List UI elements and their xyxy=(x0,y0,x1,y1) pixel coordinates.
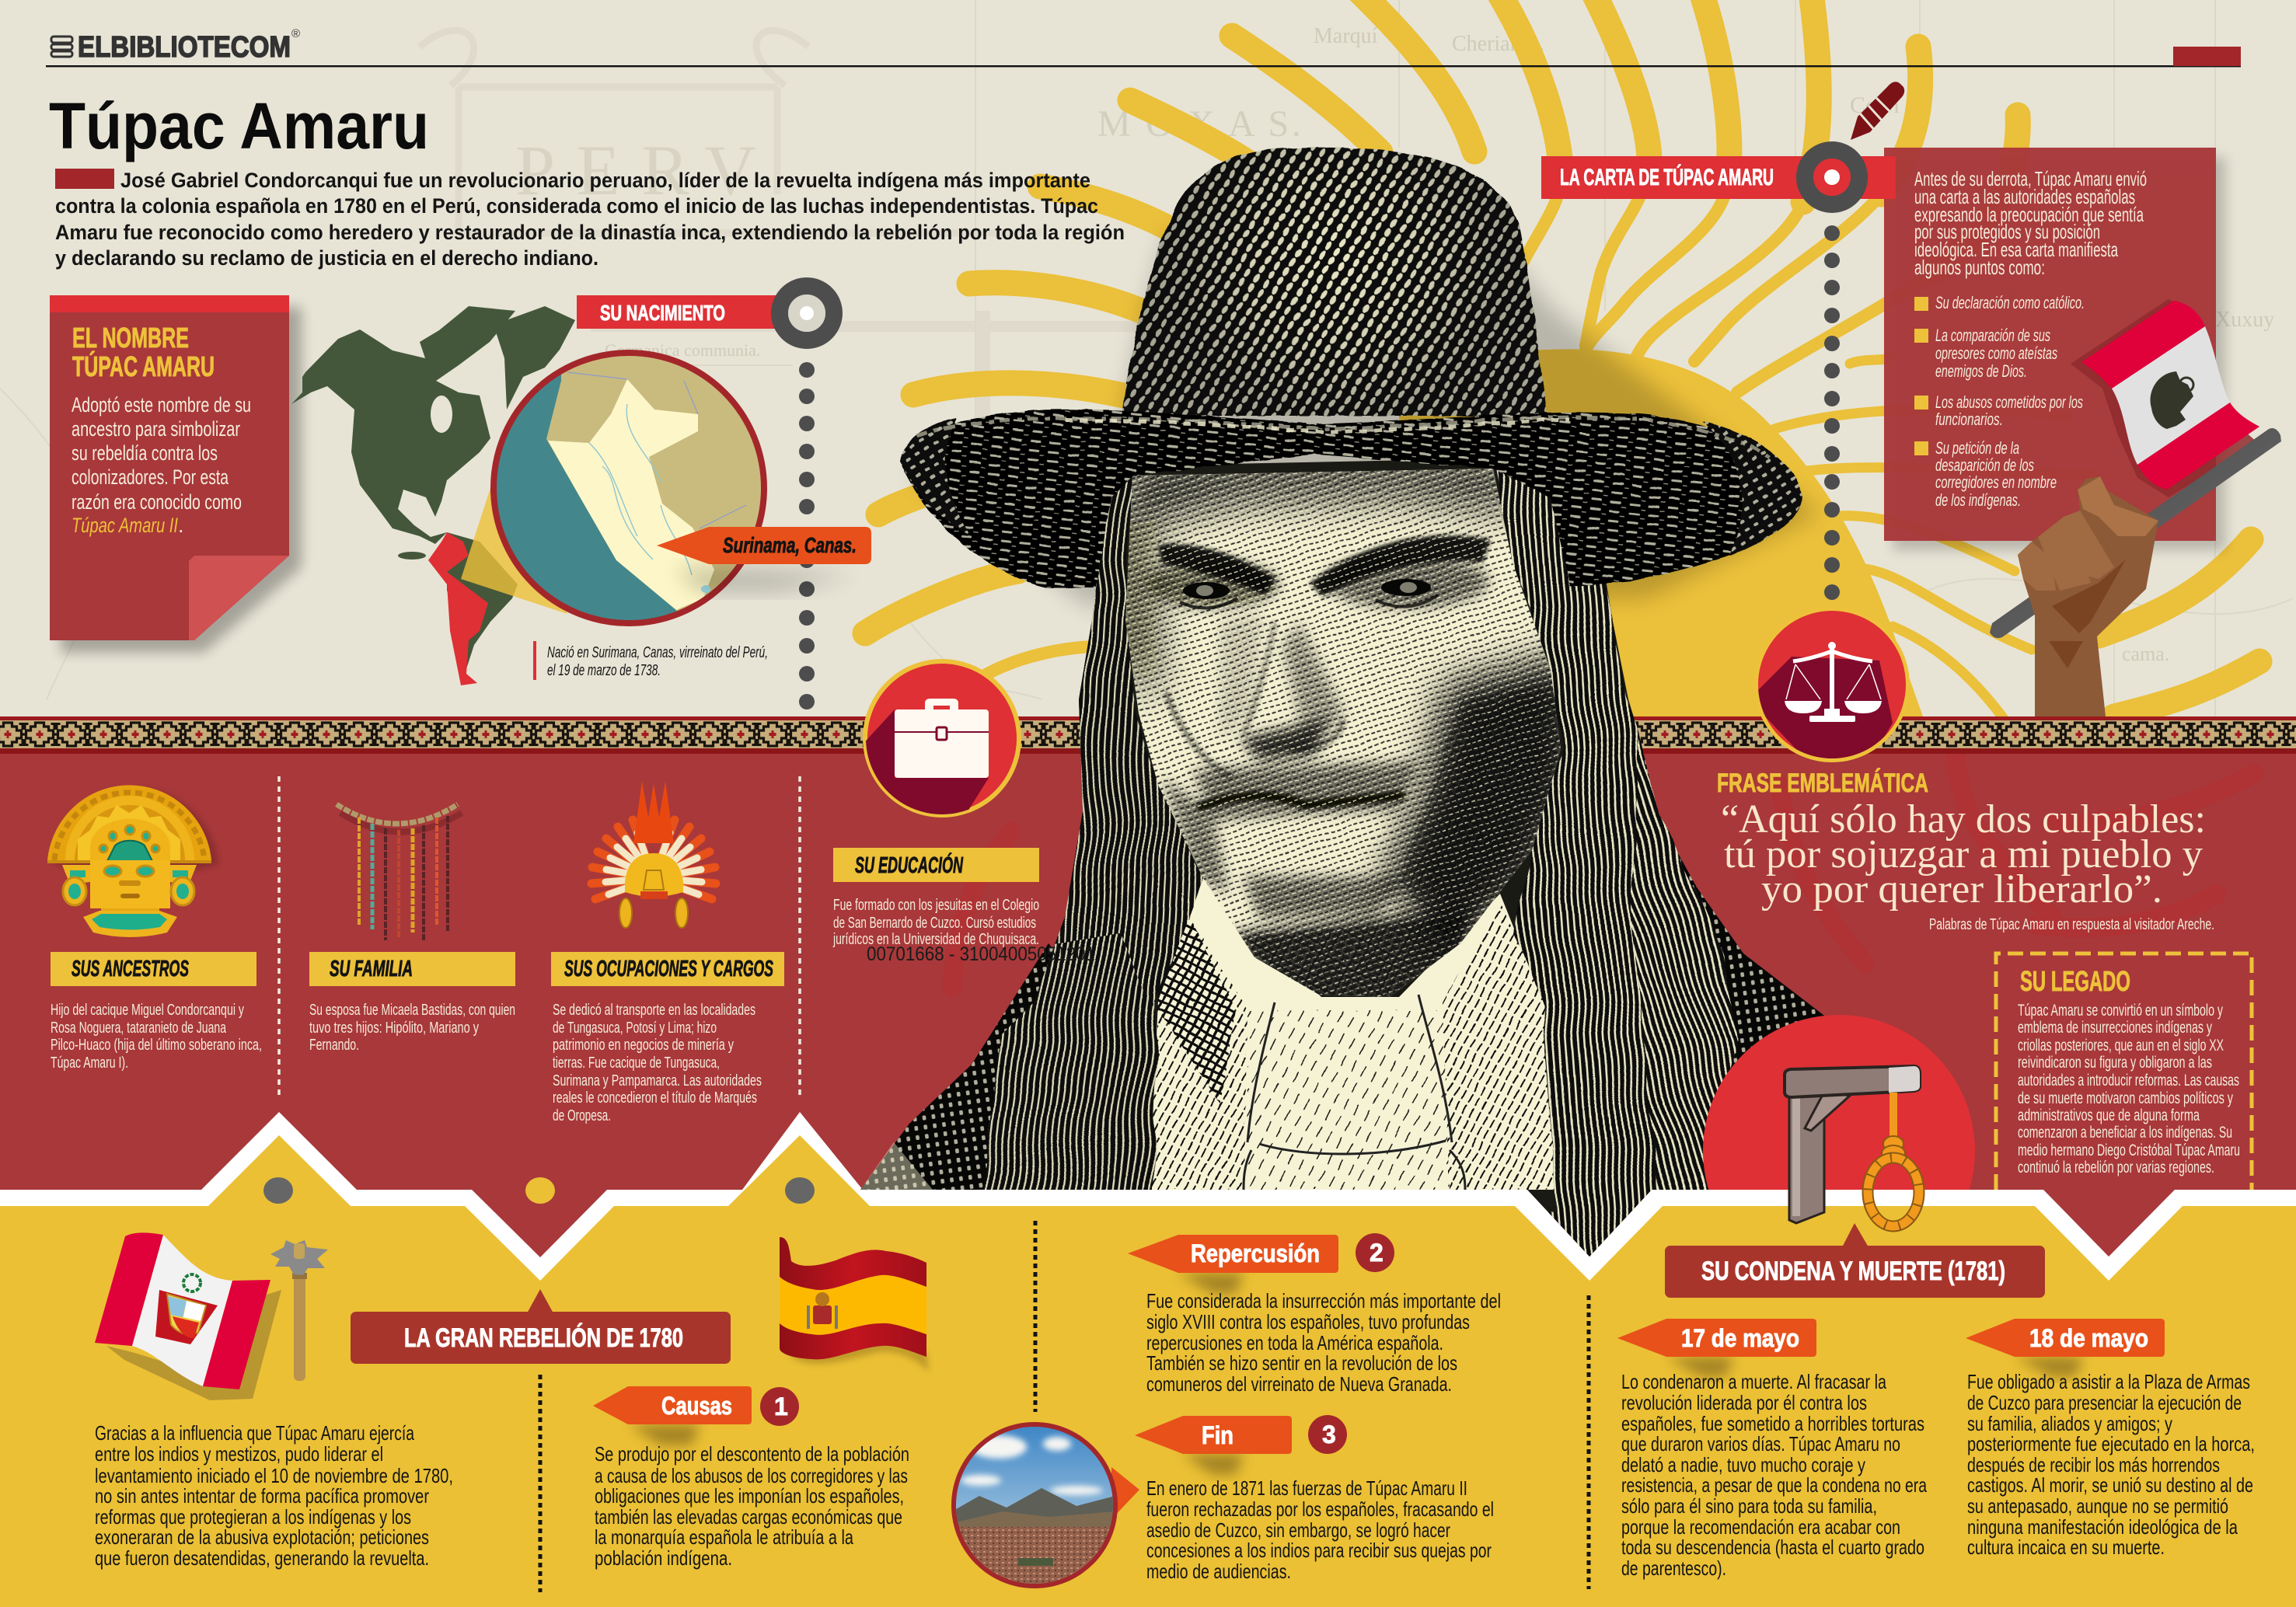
text: ancestros: Pilco-Huaco (hija del último soberano inca, xyxy=(51,1037,262,1054)
text: causas: la monarquía española le atribuía a la xyxy=(595,1525,853,1549)
icon: pencil xyxy=(1851,82,1904,140)
eyes xyxy=(1183,582,1230,599)
text: repercusion: comuneros del virreinato de Nueva Granada. xyxy=(1146,1372,1452,1396)
panel: el nombre xyxy=(50,295,302,653)
body silhouette and coat xyxy=(860,943,1053,1190)
body: reivindicaron su figura y obligaron a las xyxy=(2018,1054,2212,1072)
silhouette base xyxy=(860,458,1824,1257)
text: la gran rebelion intro: que fueron desatendidas, generando la revuelta. xyxy=(95,1546,429,1570)
text: la gran rebelion intro: Gracias a la influencia que Túpac Amaru ejercía xyxy=(95,1421,414,1445)
icon: scales circle xyxy=(1749,607,1910,777)
body: Adoptó este nombre de su xyxy=(72,393,251,417)
intro paragraph: José Gabriel Condorcanqui fue un revolucionario peruano, líder de la revuelta indígena más importante xyxy=(120,169,1090,192)
text: 17 de mayo: resistencia, a pesar de que la condena no era xyxy=(1621,1473,1927,1497)
body: una carta a las autoridades españolas xyxy=(1914,185,2135,208)
map background: Coch xyxy=(1850,92,1899,118)
header logo: ELBIBLIOTECOM xyxy=(78,31,291,64)
map background: cama. xyxy=(2122,643,2169,665)
label: su educacion: SU EDUCACIÓN xyxy=(855,852,964,878)
heading: TÚPAC AMARU xyxy=(72,350,215,382)
text: fin: En enero de 1871 las fuerzas de Túpac Amaru II xyxy=(1146,1476,1467,1500)
sun and rays xyxy=(865,0,2259,719)
text: ocupaciones: reales le concedieron el título de Marqués xyxy=(553,1089,757,1107)
bullets: La comparación de sus xyxy=(1935,326,2050,345)
text: causas: obligaciones que les imponían los españoles, xyxy=(595,1484,904,1508)
body xyxy=(1914,167,2147,279)
icon: quipu necklace xyxy=(337,804,462,942)
body xyxy=(72,393,251,537)
text: 17 de mayo: de parentesco). xyxy=(1621,1556,1726,1580)
text: ocupaciones: Surimana y Pampamarca. Las autoridades xyxy=(553,1072,762,1089)
icon: peru flag xyxy=(95,1232,281,1400)
text: la gran rebelion intro: reformas que protegieran a los indígenas y los xyxy=(95,1505,411,1529)
body: razón era conocido como xyxy=(72,490,242,514)
pole xyxy=(1990,428,2281,638)
text: ancestros: Túpac Amaru I). xyxy=(51,1054,128,1072)
woven pattern band xyxy=(0,716,2296,754)
map background: Germanica communia. xyxy=(605,340,760,360)
text: 17 de mayo xyxy=(1621,1370,1927,1580)
text: fin: asedio de Cuzco, sin embargo, se logró hacer xyxy=(1146,1518,1450,1542)
icon: gallows and noose xyxy=(1785,1066,1920,1226)
body: administrativos que de alguna forma xyxy=(2018,1107,2200,1124)
text: ocupaciones xyxy=(553,1002,762,1124)
map background: M O X A S. xyxy=(1097,103,1301,145)
body: Antes de su derrota, Túpac Amaru envió xyxy=(1914,167,2147,190)
text: 18 de mayo: su familia, aliados y amigos; y xyxy=(1967,1412,2172,1435)
face local shading xyxy=(1146,555,1488,1006)
text: educacion xyxy=(832,897,1039,948)
bullets: Su petición de la xyxy=(1935,438,2019,458)
tag: fin: Fin xyxy=(1202,1421,1233,1449)
map: americas xyxy=(291,306,575,685)
black dashed dividers xyxy=(540,1221,1589,1592)
hair right xyxy=(1493,469,1737,1267)
hand xyxy=(2018,476,2158,716)
panel: la carta xyxy=(1884,148,2225,550)
text: la gran rebelion intro: entre los indios y mestizos, pudo liderar el xyxy=(95,1442,383,1466)
title: su condena y muerte: SU CONDENA Y MUERTE (1781) xyxy=(1701,1257,2005,1286)
text: educacion: jurídicos en la Universidad de Chuquisaca. xyxy=(832,931,1039,948)
body: su rebeldía contra los xyxy=(72,441,218,465)
face broad shading xyxy=(1111,458,1578,964)
text: la gran rebelion intro xyxy=(95,1421,453,1570)
brows, eye sockets and mouth xyxy=(1158,535,1491,807)
frase emblematica heading: FRASE EMBLEMÁTICA xyxy=(1717,769,1928,798)
text: fin xyxy=(1146,1476,1494,1583)
icon: mace xyxy=(270,1240,328,1381)
intro paragraph xyxy=(55,169,1125,270)
map background: PERV xyxy=(515,131,756,210)
column dividers xyxy=(279,776,800,1096)
text: causas: población indígena. xyxy=(595,1546,732,1570)
text: 17 de mayo: delató a nadie, tuvo mucho coraje y xyxy=(1621,1453,1865,1476)
text: fin: fueron rechazadas por los españoles, fracasando el xyxy=(1146,1497,1494,1521)
callout: surinama: Surinama, Canas. xyxy=(723,533,857,557)
text: ocupaciones: Se dedicó al transporte en las localidades xyxy=(553,1002,755,1019)
body: expresando la preocupación que sentía xyxy=(1914,203,2144,226)
intro paragraph: contra la colonia española en 1780 en el Perú, considerada como el inicio de las luchas independentistas. Túpac xyxy=(55,194,1098,218)
body: ideológica. En esa carta manifiesta xyxy=(1914,238,2118,261)
tag: 17 de mayo xyxy=(1617,1319,1816,1377)
body: colonizadores. Por esta xyxy=(72,465,229,489)
panel: su legado xyxy=(1996,953,2252,1190)
text: familia: Fernando. xyxy=(309,1037,359,1054)
south america green xyxy=(447,532,518,678)
icon: inca gold mask xyxy=(47,785,218,937)
tag: repercusion: Repercusión xyxy=(1191,1239,1320,1267)
text: 18 de mayo xyxy=(1967,1370,2255,1559)
text: ocupaciones: patrimonio en negocios de minería y xyxy=(553,1037,734,1054)
label: sus ancestros xyxy=(51,952,256,986)
label: sus ancestros: SUS ANCESTROS xyxy=(72,957,189,981)
tag: causas xyxy=(593,1386,799,1445)
su nacimiento label xyxy=(577,295,777,329)
dotted timeline: carta xyxy=(1805,150,1859,600)
label: sus ocupaciones y cargos xyxy=(551,952,784,986)
flag xyxy=(2071,299,2258,497)
text: causas: a causa de los abusos de los corregidores y las xyxy=(595,1464,908,1487)
quote: yo por querer liberarlo”. xyxy=(1761,867,2162,912)
text: 17 de mayo: revolución liderada por él contra los xyxy=(1621,1391,1867,1414)
la carta label bar: LA CARTA DE TÚPAC AMARU xyxy=(1560,164,1774,190)
text: educacion: de San Bernardo de Cuzco. Cursó estudios xyxy=(833,915,1036,932)
text: ancestros xyxy=(51,1002,262,1072)
chest xyxy=(1150,878,1562,1190)
stray code text: 00701668 - 31004005051201 xyxy=(867,943,1095,965)
caption: birth xyxy=(533,641,768,680)
label: sus ocupaciones y cargos: SUS OCUPACIONES Y CARGOS xyxy=(564,957,773,981)
heading xyxy=(72,322,215,382)
body: Túpac Amaru II xyxy=(72,514,178,537)
title: su condena y muerte xyxy=(1665,1223,2045,1298)
tag: 18 de mayo: 18 de mayo xyxy=(2029,1324,2148,1352)
portrait of Túpac Amaru xyxy=(860,148,1824,1267)
quote: tú por sojuzgar a mi pueblo y xyxy=(1724,832,2203,877)
label: su educacion xyxy=(833,848,1039,882)
text: ocupaciones: de Oropesa. xyxy=(553,1107,611,1124)
icon: hand holding flag xyxy=(1990,299,2281,716)
flag emblem xyxy=(2151,371,2193,429)
text: ocupaciones: de Tungasuca, Potosí y Lima; hizo xyxy=(553,1020,717,1037)
icon: feather headdress xyxy=(591,781,716,928)
hair left xyxy=(978,466,1203,1212)
text: repercusion: repercusiones en toda la América española. xyxy=(1146,1331,1443,1354)
text: fin: medio de audiencias. xyxy=(1146,1560,1291,1583)
text: ancestros: Hijo del cacique Miguel Condorcanqui y xyxy=(51,1002,244,1019)
tag: repercusion xyxy=(1128,1233,1394,1294)
text: 17 de mayo: Lo condenaron a muerte. Al fracasar la xyxy=(1621,1370,1886,1393)
label: su familia xyxy=(309,952,515,986)
header rule xyxy=(46,47,2241,67)
body: algunos puntos como: xyxy=(1914,256,2045,279)
title: la gran rebelion: LA GRAN REBELIÓN DE 1780 xyxy=(404,1323,683,1353)
heading: SU LEGADO xyxy=(2020,965,2130,997)
body: ancestro para simbolizar xyxy=(72,417,240,441)
text: familia: tuvo tres hijos: Hipólito, Mariano y xyxy=(309,1020,479,1037)
tag: causas: 1 xyxy=(774,1393,788,1421)
map background: Xuxuy xyxy=(2215,308,2274,332)
tag: causas: Causas xyxy=(661,1392,732,1420)
peru map circle xyxy=(482,342,769,633)
tag: 17 de mayo: 17 de mayo xyxy=(1681,1324,1799,1352)
text: causas xyxy=(595,1442,909,1570)
icon: briefcase circle xyxy=(843,659,1021,824)
text: causas: también las elevadas cargas económicas que xyxy=(595,1505,902,1529)
label: su familia: SU FAMILIA xyxy=(330,957,413,981)
text: 18 de mayo: cultura incaica en su muerte. xyxy=(1967,1536,2165,1559)
text: la gran rebelion intro: no sin antes intentar de forma pacífica promover xyxy=(95,1484,429,1508)
caption: birth: Nació en Surimana, Canas, virreinato del Perú, xyxy=(547,644,768,661)
hat crown xyxy=(899,148,1802,588)
text: causas: Se produjo por el descontento de la población xyxy=(595,1442,909,1466)
body: . xyxy=(178,514,184,537)
bullets: opresores como ateístas xyxy=(1935,343,2057,363)
text: 17 de mayo: sólo para él sino para toda su familia, xyxy=(1621,1494,1877,1518)
intro paragraph: y declarando su reclamo de justicia en el derecho indiano. xyxy=(55,246,598,270)
tag: fin: 3 xyxy=(1322,1421,1336,1448)
bullets xyxy=(1914,293,2085,510)
text: repercusion: También se hizo sentir en la revolución de los xyxy=(1146,1351,1457,1375)
north america xyxy=(291,306,515,544)
caption: birth: el 19 de marzo de 1738. xyxy=(547,662,661,679)
bullets: desaparición de los xyxy=(1935,455,2034,475)
bullets: de los indígenas. xyxy=(1935,490,2021,510)
tag: repercusion: 2 xyxy=(1370,1239,1384,1267)
su nacimiento label: SU NACIMIENTO xyxy=(600,301,725,325)
title: Túpac Amaru xyxy=(49,89,429,162)
text: repercusion: siglo XVIII contra los españoles, tuvo profundas xyxy=(1146,1310,1470,1333)
text: ocupaciones: tierras. Fue cacique de Tungasuca, xyxy=(553,1054,720,1072)
text: repercusion: Fue considerada la insurrección más importante del xyxy=(1146,1289,1501,1312)
face xyxy=(1111,458,1578,1006)
quote xyxy=(1721,797,2214,933)
text: 17 de mayo: españoles, fue sometido a horribles torturas xyxy=(1621,1412,1924,1435)
quote: “Aquí sólo hay dos culpables: xyxy=(1721,797,2206,842)
flag emblem xyxy=(155,1290,218,1344)
bullets: corregidores en nombre xyxy=(1935,472,2057,492)
icon: spain flag xyxy=(780,1237,929,1372)
intro paragraph: Amaru fue reconocido como heredero y restaurador de la dinastía inca, extendiendo la rebelión por toda la región xyxy=(55,221,1125,244)
text: 17 de mayo: toda su descendencia (hasta el cuarto grado xyxy=(1621,1536,1924,1559)
text: repercusion xyxy=(1146,1289,1501,1396)
red middle section xyxy=(0,750,2296,1278)
body: por sus protegidos y su posición xyxy=(1914,220,2100,243)
tag: fin xyxy=(1135,1415,1347,1475)
text: familia xyxy=(309,1002,515,1054)
peru and chile highlighted xyxy=(428,532,488,685)
tag: 18 de mayo xyxy=(1966,1319,2165,1377)
bullets: enemigos de Dios. xyxy=(1935,361,2027,381)
map background: Marquí xyxy=(1314,24,1378,48)
circle: gallows backdrop xyxy=(1703,1015,1975,1287)
bullets: Los abusos cometidos por los xyxy=(1935,392,2083,412)
hat shadow xyxy=(1048,228,1819,615)
callout: surinama xyxy=(657,527,871,591)
chevron edge xyxy=(0,1112,2296,1607)
map background: Cherianas. xyxy=(1452,32,1544,56)
body xyxy=(2018,1002,2240,1176)
bullets: funcionarios. xyxy=(1935,410,2003,429)
text: educacion: Fue formado con los jesuitas en el Colegio xyxy=(833,897,1039,914)
bullets: Su declaración como católico. xyxy=(1935,293,2085,312)
text: familia: Su esposa fue Micaela Bastidas, con quien xyxy=(309,1002,515,1019)
text: fin: concesiones a los indios para recibir sus quejas por xyxy=(1146,1539,1492,1562)
header logo: ® xyxy=(291,27,300,40)
hat brim xyxy=(899,410,1802,588)
text: 17 de mayo: que duraron varios días. Túpac Amaru no xyxy=(1621,1432,1900,1455)
text: la gran rebelion intro: levantamiento iniciado el 10 de noviembre de 1780, xyxy=(95,1464,453,1487)
greenland xyxy=(494,306,575,410)
zoom cone xyxy=(461,466,567,614)
yellow lower section xyxy=(0,1135,2296,1607)
text: la gran rebelion intro: exoneraran de la abusiva explotación; peticiones xyxy=(95,1525,429,1549)
heading: EL NOMBRE xyxy=(72,322,189,354)
title: la gran rebelion xyxy=(351,1289,731,1364)
text: 18 de mayo: después de recibir los más horrendos xyxy=(1967,1453,2220,1476)
dotted timeline: nacimiento xyxy=(780,286,834,709)
text: ancestros: Rosa Noguera, tataranieto de Juana xyxy=(51,1020,227,1037)
photo: cusco xyxy=(951,1422,1139,1588)
la carta label bar xyxy=(1541,156,1896,199)
text: 17 de mayo: porque la recomendación era acabar con xyxy=(1621,1515,1900,1539)
map background xyxy=(0,0,2296,719)
